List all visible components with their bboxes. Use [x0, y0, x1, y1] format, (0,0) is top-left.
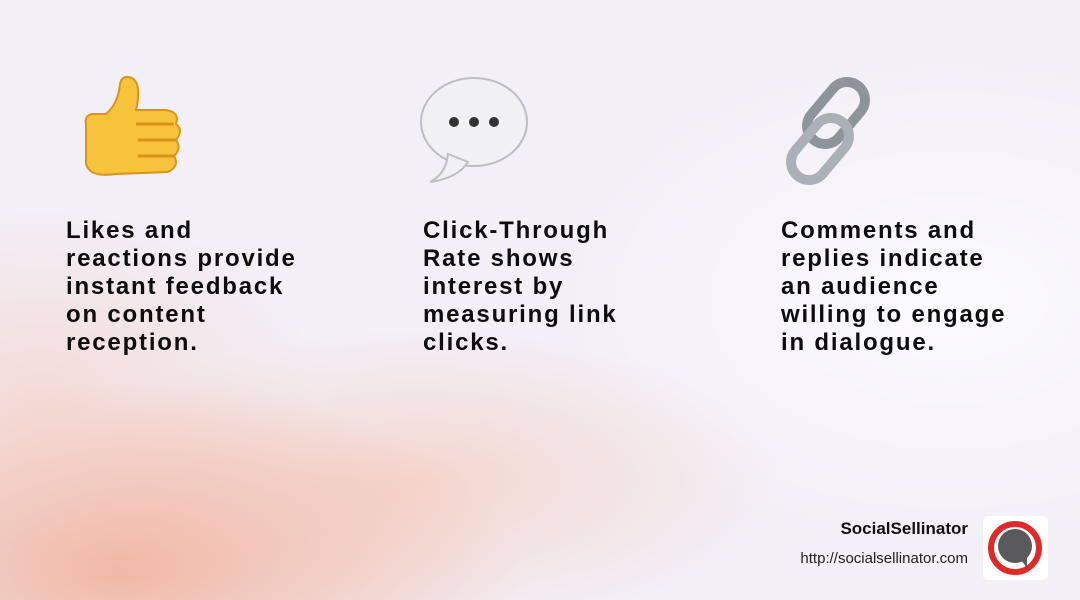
text: comments: willing to engage: [781, 301, 1006, 328]
text: comments: replies indicate: [781, 245, 985, 272]
text: likes: reception.: [66, 329, 199, 356]
text: likes: Likes and: [66, 217, 193, 244]
text: likes: on content: [66, 301, 207, 328]
text: comments: Comments and: [781, 217, 976, 244]
text: comments: in dialogue.: [781, 329, 936, 356]
icon: chain link: [786, 77, 870, 185]
text: click-through: clicks.: [423, 329, 509, 356]
text: click-through: measuring link: [423, 301, 618, 328]
text: likes: reactions provide: [66, 245, 297, 272]
text: likes: instant feedback: [66, 273, 284, 300]
text: comments: [781, 217, 1006, 356]
icon: speech bubble: [420, 77, 528, 183]
brand name: SocialSellinator: [840, 519, 968, 538]
text: click-through: Rate shows: [423, 245, 574, 272]
brand url: http://socialsellinator.com: [800, 550, 968, 567]
text: comments: an audience: [781, 273, 940, 300]
text: click-through: [423, 217, 618, 356]
icon: thumbs up: [84, 76, 181, 176]
text: click-through: Click-Through: [423, 217, 609, 244]
text: click-through: interest by: [423, 273, 564, 300]
text: likes: [66, 217, 297, 356]
logo: [983, 516, 1048, 580]
